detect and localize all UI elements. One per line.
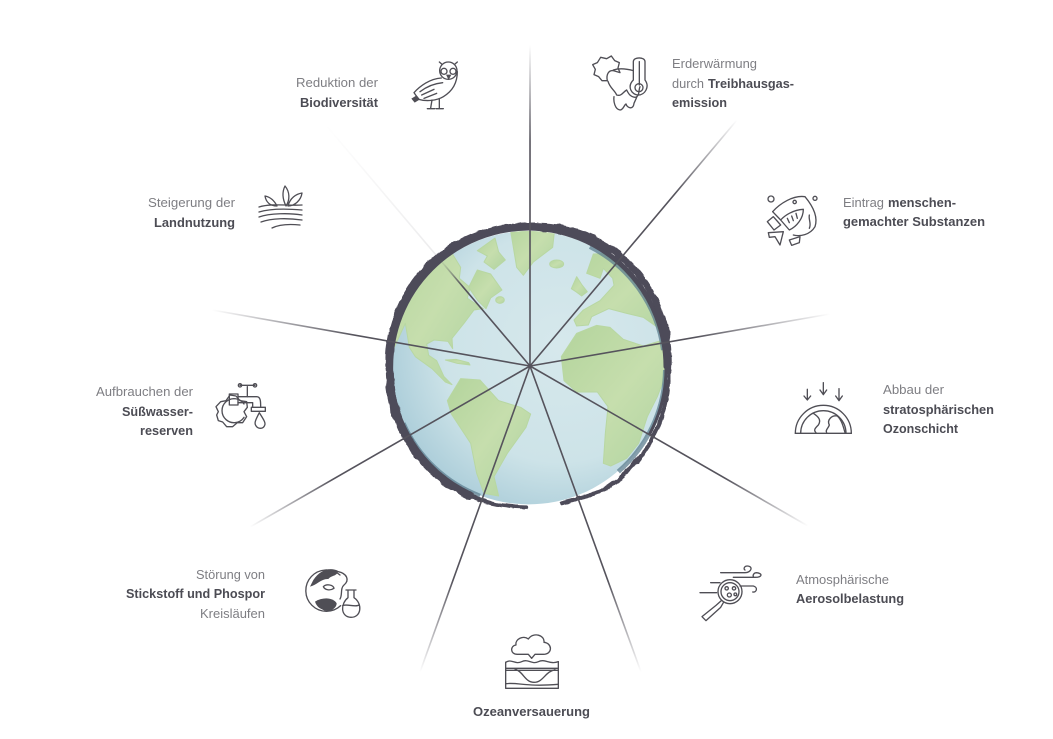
text: Ozeanversauerung: Ozeanversauerung (473, 704, 590, 719)
panel: Stickstoff und Phosphor (126, 567, 360, 621)
dark rim base (391, 228, 666, 494)
text: Eintrag menschengemachter Substanzen: Eintrag (843, 195, 884, 210)
text: Abbau der stratosphärischen Ozonschicht: Ozonschicht (883, 421, 959, 436)
inner rim shade (403, 247, 665, 496)
text: Aufbrauchen der Süßwasserreserven: Süßwasser- (122, 404, 193, 419)
icon: sun, thermometer, melting earth (593, 56, 647, 110)
icon: owl (411, 62, 457, 109)
text: Erderwärmung durch Treibhausgasemission (672, 56, 794, 110)
text: Abbau der stratosphärischen Ozonschicht: Abbau der (883, 382, 945, 397)
text: Aufbrauchen der Süßwasserreserven: reserven (140, 423, 193, 438)
icon: earth with flask (306, 569, 360, 617)
dark rough rim (389, 226, 669, 507)
text: Erderwärmung durch Treibhausgasemission: Erderwärmung (672, 56, 757, 71)
continents (390, 223, 677, 496)
text: Störung von Stickstoff und Phospor Kreisläufen: Störung von (196, 567, 265, 582)
text: Eintrag menschengemachter Substanzen: gemachter Substanzen (843, 214, 985, 229)
panel: Erderwärmung (593, 56, 794, 110)
panel: Biodiversität (296, 62, 457, 110)
text: Erderwärmung durch Treibhausgasemission: Treibhausgas- (708, 76, 794, 91)
globe (389, 223, 677, 507)
panel: Ozonschicht (795, 382, 994, 436)
text: Erderwärmung durch Treibhausgasemission: emission (672, 95, 727, 110)
text: Reduktion der Biodiversität: Biodiversität (300, 95, 379, 110)
text: Steigerung der Landnutzung (148, 195, 236, 230)
text: Erderwärmung durch Treibhausgasemission: durch (672, 76, 704, 91)
text: Steigerung der Landnutzung: Steigerung der (148, 195, 236, 210)
icon: gear, tap and water drop (216, 384, 265, 428)
text: Störung von Stickstoff und Phospor Kreisläufen (126, 567, 265, 621)
text: Eintrag menschengemachter Substanzen (843, 195, 985, 229)
panel: Ozeanversauerung (473, 635, 590, 719)
panel: Süßwasserreserven (96, 384, 265, 438)
icon: fields with sprout (259, 186, 302, 228)
icon: fish with plastic (767, 196, 817, 245)
text: Atmosphärische Aerosolbelastung: Aerosolbelastung (796, 591, 904, 606)
radial lines (212, 45, 830, 672)
ocean disc (392, 231, 665, 504)
text: Reduktion der Biodiversität: Reduktion der (296, 75, 379, 90)
text: Störung von Stickstoff und Phospor Kreisläufen: Stickstoff und Phospor (126, 586, 265, 601)
text: Atmosphärische Aerosolbelastung: Atmosphärische (796, 572, 889, 587)
text: Atmosphärische Aerosolbelastung (796, 572, 904, 606)
text: Abbau der stratosphärischen Ozonschicht: stratosphärischen (883, 402, 994, 417)
panel: Substanzen (767, 195, 985, 245)
panel: Landnutzung (148, 186, 302, 230)
text: Steigerung der Landnutzung: Landnutzung (154, 215, 235, 230)
icon: magnifier with aerosols and wind (700, 566, 761, 621)
text: Aufbrauchen der Süßwasserreserven: Aufbrauchen der (96, 384, 194, 399)
text: Abbau der stratosphärischen Ozonschicht (883, 382, 994, 436)
panel: Aerosolbelastung (700, 566, 904, 621)
icon: cloud over ocean layers (506, 635, 558, 688)
text: Eintrag menschengemachter Substanzen: menschen- (888, 195, 956, 210)
text: Aufbrauchen der Süßwasserreserven (96, 384, 194, 438)
icon: ozone dome with arrows (795, 383, 851, 433)
text: Störung von Stickstoff und Phospor Kreisläufen: Kreisläufen (200, 606, 265, 621)
text: Reduktion der Biodiversität (296, 75, 379, 110)
